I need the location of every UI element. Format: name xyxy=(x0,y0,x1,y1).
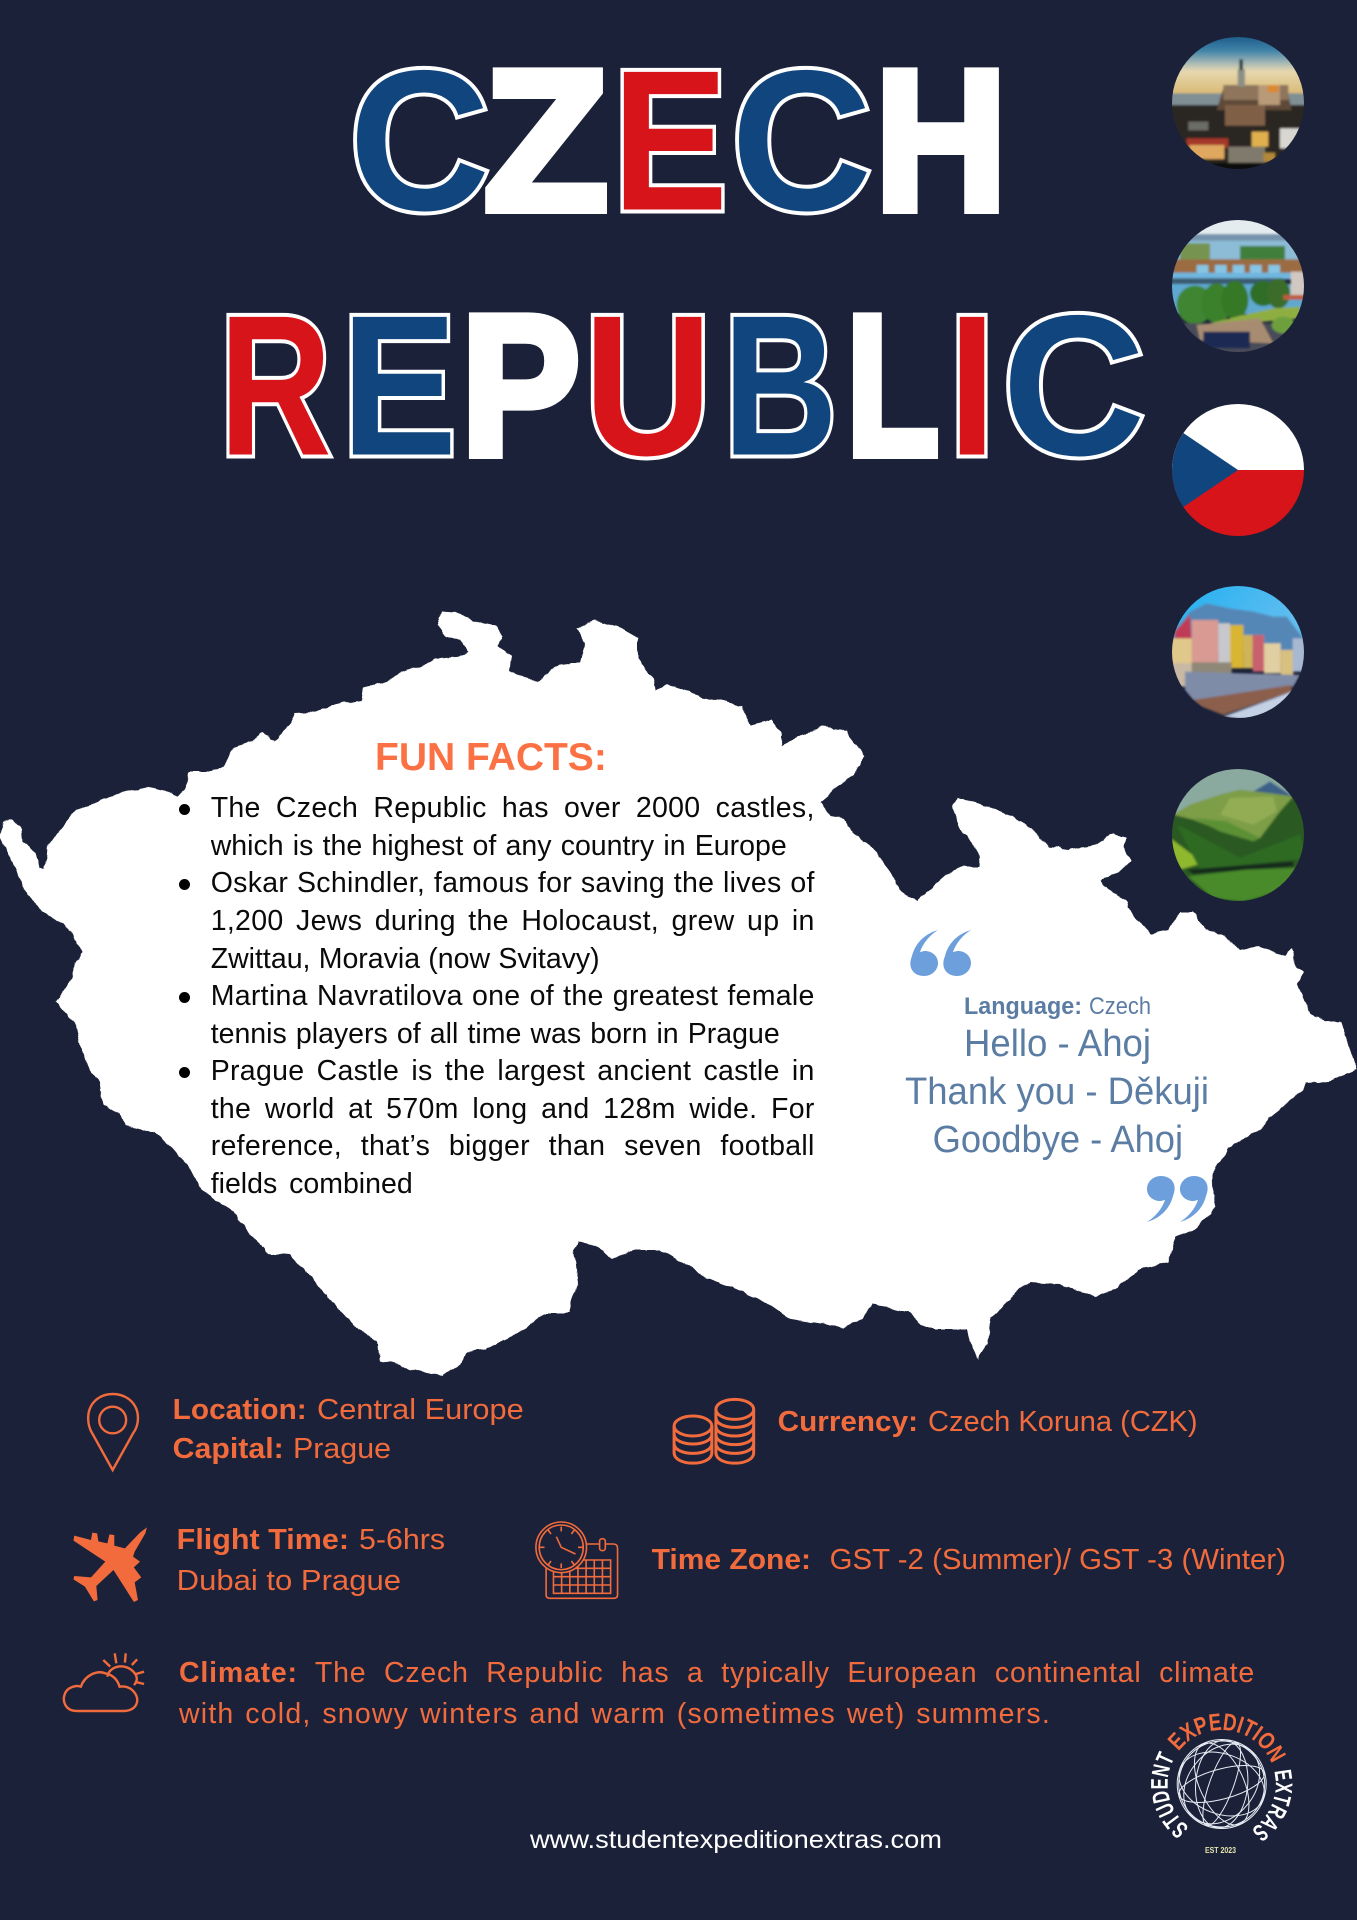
language label xyxy=(964,993,1151,1020)
flight time text: Dubai to Prague xyxy=(177,1565,401,1597)
time zone text: GST -2 (Summer)/ GST -3 (Winter) xyxy=(830,1544,1286,1576)
title line: CZECH: H xyxy=(875,28,1007,252)
bullet list xyxy=(179,792,815,1200)
flight time text: Flight Time: xyxy=(177,1524,349,1556)
time zone text: Time Zone: xyxy=(652,1544,811,1576)
location and capital text: Central Europe xyxy=(317,1394,524,1426)
logo: Student Expedition Extras xyxy=(1151,1713,1292,1855)
website: www.studentexpeditionextras.com xyxy=(529,1826,942,1854)
bullet list: 1,200 Jews during the Holocaust, grew up in xyxy=(211,905,815,937)
bullet list: fields combined xyxy=(211,1168,413,1200)
title line: REPUBLIC: B xyxy=(723,275,838,498)
bullet list: tennis players of all time was born in Prague xyxy=(211,1018,780,1050)
location and capital text xyxy=(173,1394,524,1465)
logo globe xyxy=(1168,1729,1275,1839)
location and capital text: Location: xyxy=(173,1394,307,1426)
language panel xyxy=(905,930,1209,1222)
icon: clock and calendar xyxy=(536,1522,618,1598)
photo: hilltop castle at sunset xyxy=(1172,37,1304,169)
title line: CZECH: E xyxy=(612,29,728,252)
bullet list: which is the highest of any country in Europe xyxy=(211,830,787,862)
title line: REPUBLIC: L xyxy=(846,273,939,497)
icon: closing quote mark xyxy=(1147,1176,1208,1222)
phrases: Thank you - Děkuji xyxy=(905,1071,1209,1113)
bullet list: Oskar Schindler, famous for saving the lives of xyxy=(211,867,815,899)
title line: REPUBLIC xyxy=(219,273,1145,498)
phrases xyxy=(905,1023,1209,1161)
flag of the Czech Republic xyxy=(1170,402,1306,539)
title line: REPUBLIC: E xyxy=(341,274,457,497)
icon: cloud and sun xyxy=(64,1653,144,1711)
title xyxy=(219,28,1145,498)
title line: REPUBLIC: C xyxy=(1002,275,1145,498)
currency text: Czech Koruna (CZK) xyxy=(928,1406,1198,1438)
title line: REPUBLIC: U xyxy=(584,275,712,498)
title line: REPUBLIC: I xyxy=(948,274,996,498)
title line: CZECH: C xyxy=(349,28,490,252)
bullet list: Martina Navratilova one of the greatest female xyxy=(211,980,815,1012)
flight time text: 5-6hrs xyxy=(359,1524,445,1556)
bullet list: the world at 570m long and 128m wide. For xyxy=(211,1093,815,1125)
heading: fun facts: FUN FACTS: xyxy=(375,736,607,779)
logo text: STUDENT: STUDENT xyxy=(1151,1750,1188,1838)
title line: CZECH xyxy=(349,28,1007,252)
bullet list: reference, that’s bigger than seven football xyxy=(211,1130,815,1162)
photo: colourful Karlovy Vary buildings xyxy=(1172,586,1304,718)
language label: Language: xyxy=(964,993,1082,1020)
logo text: est 2023: EST 2023 xyxy=(1205,1846,1236,1855)
language label: Czech xyxy=(1089,993,1151,1020)
flight time text xyxy=(177,1524,445,1597)
climate text: with cold, snowy winters and warm (sometimes wet) summers. xyxy=(179,1698,1051,1730)
title line: REPUBLIC: P xyxy=(461,274,580,498)
title line: CZECH: C xyxy=(731,28,872,252)
icon: airplane xyxy=(73,1527,147,1602)
icon: coins xyxy=(674,1399,754,1463)
icon: opening quote mark xyxy=(910,930,971,976)
logo text: EXPEDITION: EXPEDITION xyxy=(1167,1713,1286,1763)
currency text: Currency: xyxy=(778,1406,918,1438)
phrases: Goodbye - Ahoj xyxy=(933,1119,1183,1161)
climate text xyxy=(179,1657,1255,1730)
phrases: Hello - Ahoj xyxy=(964,1023,1151,1065)
currency text xyxy=(778,1406,1198,1438)
bullet list: Prague Castle is the largest ancient castle in xyxy=(211,1055,815,1087)
location and capital text: Prague xyxy=(293,1433,391,1465)
title line: REPUBLIC: R xyxy=(219,274,332,497)
climate text: Climate: The Czech Republic has a typically European continental climate xyxy=(179,1657,1255,1689)
icon: location pin xyxy=(88,1394,138,1470)
photo: Prague bridges xyxy=(1172,220,1304,352)
panel: fun facts xyxy=(179,736,815,1200)
location and capital text: Capital: xyxy=(173,1433,284,1465)
bullet list: Zwittau, Moravia (now Svitavy) xyxy=(211,942,600,974)
title line: CZECH: Z xyxy=(484,28,608,252)
bullet list: The Czech Republic has over 2000 castles, xyxy=(211,792,815,824)
logo text: EXTRAS: EXTRAS xyxy=(1253,1770,1292,1841)
map of the Czech Republic xyxy=(0,611,1357,1376)
photo: green hills landscape xyxy=(1172,769,1304,901)
